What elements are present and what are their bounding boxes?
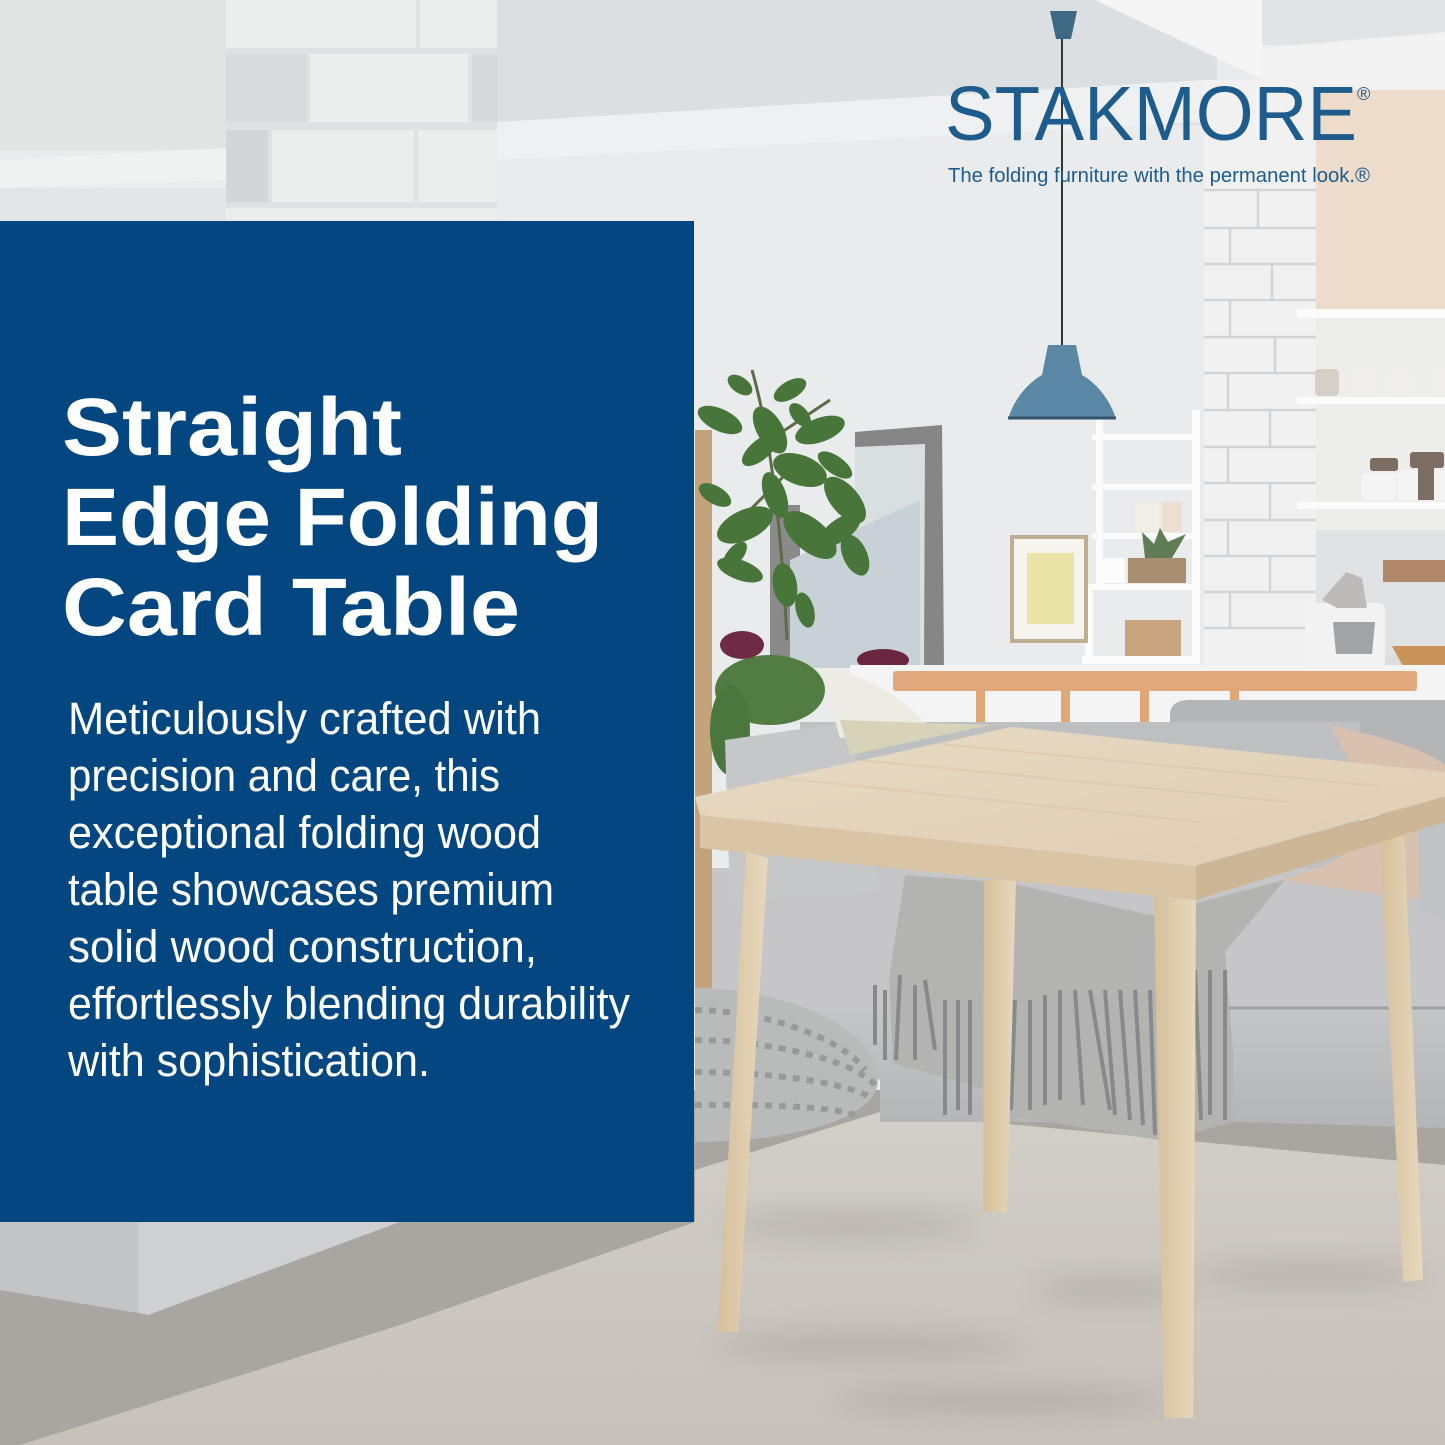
table shadows on rug	[710, 1213, 1430, 1412]
brick column right	[1204, 80, 1316, 670]
white ladder shelf	[1080, 410, 1200, 664]
body text: Meticulously crafted with	[68, 693, 541, 744]
body text	[67, 693, 630, 1086]
floor	[0, 1090, 1445, 1445]
grey sofa	[712, 668, 1445, 1128]
logo: Stakmore: ®	[1357, 84, 1370, 104]
pendant lamp	[1008, 11, 1116, 419]
plant	[694, 370, 909, 775]
apron rails	[700, 797, 1445, 900]
body text: table showcases premium	[68, 864, 554, 915]
body text: effortlessly blending durability	[68, 978, 630, 1029]
folding wood table	[695, 727, 1445, 1418]
body text: exceptional folding wood	[68, 807, 541, 858]
framed picture	[1010, 535, 1088, 643]
back legs	[983, 825, 1423, 1282]
tabletop	[695, 727, 1445, 866]
brick column left	[226, 0, 497, 221]
heading: Straight	[62, 382, 402, 473]
panel: blue text box	[0, 221, 694, 1222]
logo tagline: The folding furniture with the permanent look.®	[948, 165, 1370, 187]
counter with wooden rail	[850, 665, 1445, 728]
body text: precision and care, this	[68, 750, 500, 801]
body text: with sophistication.	[67, 1035, 430, 1086]
logo: Stakmore: STAKMORE	[945, 71, 1357, 157]
heading: Edge Folding	[62, 472, 603, 563]
sofa corner bottom-left	[0, 1222, 400, 1315]
heading: Card Table	[62, 562, 520, 653]
wooden shelf side	[695, 430, 712, 990]
knit pouf	[695, 988, 878, 1142]
fringed throw blanket	[875, 875, 1285, 1142]
body text: solid wood construction,	[68, 921, 537, 972]
heading	[62, 382, 603, 653]
rug	[20, 1112, 1445, 1445]
kitchen shelves	[1297, 309, 1445, 680]
standing mirror	[770, 425, 944, 668]
front legs	[718, 852, 1196, 1418]
